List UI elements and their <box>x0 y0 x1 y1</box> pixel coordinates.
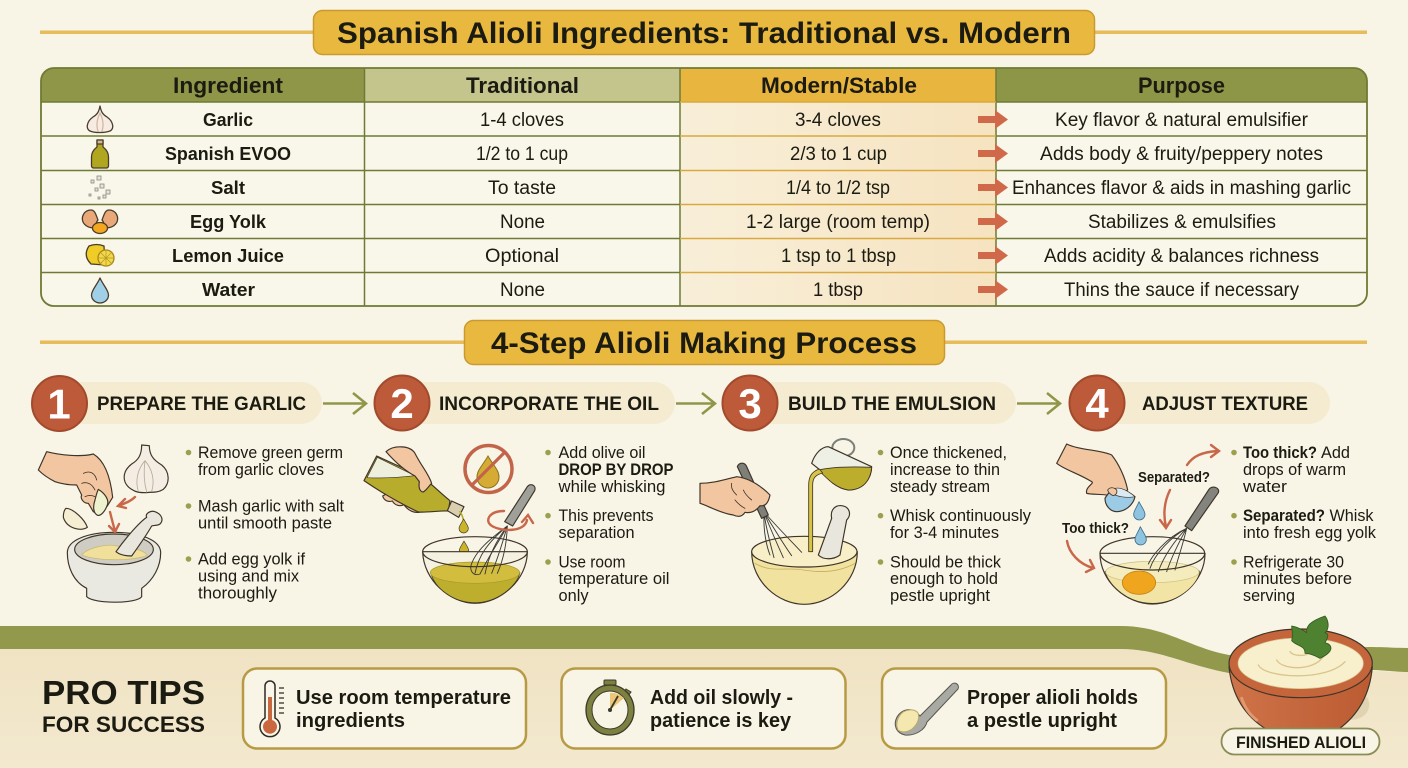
row: water: 1 tbsp <box>813 280 863 301</box>
step 1 <box>32 376 366 602</box>
step 3 instructions: Whisk continuously <box>890 506 1031 525</box>
row: Spanish EVOO: Spanish EVOO <box>165 144 291 164</box>
step 3 instructions: increase to thin <box>890 460 1000 479</box>
row: salt <box>89 176 1351 199</box>
row: salt: To taste <box>488 178 556 199</box>
bowl <box>1229 616 1372 729</box>
row: lemon juice: Optional <box>485 246 559 267</box>
step 1 instructions: using and mix <box>198 566 299 586</box>
row: water: Thins the sauce if necessary <box>1064 280 1299 301</box>
row: lemon juice: 1 tsp to 1 tbsp <box>781 246 896 267</box>
icon: stopwatch <box>586 680 634 735</box>
tip card: temperature: Use room temperature <box>296 687 511 709</box>
step 3 header <box>722 376 1016 430</box>
label: finished alioli: FINISHED ALIOLI <box>1236 733 1366 752</box>
step 2 instructions: DROP BY DROP <box>558 461 674 479</box>
row: Spanish EVOO: 2/3 to 1 cup <box>790 144 887 165</box>
table header row <box>173 73 1225 98</box>
icon: spoon <box>895 683 958 735</box>
row: garlic <box>87 106 1309 132</box>
tip card: slow oil: Add oil slowly - <box>650 687 793 709</box>
row: egg yolk: Stabilizes & emulsifies <box>1088 212 1276 233</box>
tip card: slow oil <box>562 668 846 748</box>
step 2 instructions: Add olive oil <box>558 443 646 462</box>
step 4 instructions: Whisk <box>1330 506 1374 525</box>
row: garlic: 3-4 cloves <box>795 110 881 131</box>
row: water <box>92 278 1299 303</box>
row: lemon juice: Adds acidity & balances richness <box>1044 246 1319 267</box>
row: egg yolk: 1-2 large (room temp) <box>746 212 930 233</box>
step 1 instructions: thoroughly <box>198 584 277 602</box>
tip card: pestle <box>882 668 1166 748</box>
step 4 instructions: Add <box>1321 443 1350 462</box>
step 3 header: 3 <box>738 380 762 427</box>
step 3 <box>700 376 1060 605</box>
title banner <box>40 10 1367 54</box>
step 4 instructions: Separated? <box>1243 507 1325 525</box>
table header row: Modern/Stable <box>761 73 917 98</box>
row: lemon juice: Lemon Juice <box>172 246 284 266</box>
arrows and labels: adjustments: Too thick? <box>1062 521 1129 537</box>
step 2 header <box>374 376 675 430</box>
illustration: garlic and mortar <box>38 445 168 602</box>
step 2 <box>364 376 715 605</box>
step 1 header: 1 <box>47 380 71 428</box>
pro tips heading <box>42 674 205 737</box>
step 1 instructions: Add egg yolk if <box>198 550 305 568</box>
row: Spanish EVOO <box>92 140 1323 168</box>
illustration: oil bottle <box>364 447 535 603</box>
step 4 instructions: minutes before <box>1243 569 1352 588</box>
title banner: Spanish Alioli Ingredients: Traditional vs. Modern <box>337 17 1071 50</box>
row: egg yolk <box>82 210 1276 234</box>
step 4 header: ADJUST TEXTURE <box>1142 394 1308 415</box>
illustration: emulsion bowl <box>700 439 872 604</box>
step 4 header <box>1070 376 1330 430</box>
arrow 2 to 3 <box>676 393 715 414</box>
arrows: into mortar <box>109 497 135 532</box>
step 1 header <box>32 376 322 431</box>
arrow 1 to 2 <box>323 393 366 414</box>
row: salt: 1/4 to 1/2 tsp <box>786 178 890 199</box>
footer band <box>0 626 1408 768</box>
step 1 instructions: Remove green germ <box>198 443 343 462</box>
step 1 instructions: from garlic cloves <box>198 460 324 479</box>
row: water: None <box>500 280 545 301</box>
icon: thermometer <box>260 681 284 737</box>
row: salt: Salt <box>211 178 245 198</box>
row: water: Water <box>202 280 255 300</box>
step 2 instructions: while whisking <box>558 477 666 496</box>
ingredients table <box>41 68 1367 306</box>
row: garlic: Key flavor & natural emulsifier <box>1055 110 1309 131</box>
tip card: slow oil: patience is key <box>650 710 792 732</box>
step 1 instructions: until smooth paste <box>198 514 332 532</box>
row: garlic: Garlic <box>203 110 253 130</box>
label: finished alioli <box>1222 728 1380 754</box>
finished alioli bowl <box>1222 616 1380 754</box>
row: salt: Enhances flavor & aids in mashing garlic <box>1012 178 1351 199</box>
row: Spanish EVOO: Adds body & fruity/peppery notes <box>1040 144 1323 165</box>
arrows and labels: adjustments: Separated? <box>1138 470 1210 486</box>
tip card: pestle: a pestle upright <box>967 710 1117 732</box>
step 3 instructions: enough to hold <box>890 569 998 588</box>
tip card: pestle: Proper alioli holds <box>967 687 1138 709</box>
table header row: Traditional <box>466 73 579 98</box>
step 4 instructions: Too thick? <box>1243 444 1317 462</box>
illustration: adjusting bowl <box>1057 444 1219 604</box>
table header row: Purpose <box>1138 73 1225 98</box>
arrow: whisk rotation <box>488 511 533 530</box>
arrows and labels: adjustments <box>1062 445 1219 572</box>
step 3 header: BUILD THE EMULSION <box>788 394 996 415</box>
row: garlic: 1-4 cloves <box>480 110 564 131</box>
step 4 instructions <box>1231 443 1376 605</box>
step 3 instructions: Should be thick <box>890 552 1001 572</box>
step 4 header: 4 <box>1085 380 1109 427</box>
step 3 instructions: steady stream <box>890 477 990 496</box>
step 4 instructions: into fresh egg yolk <box>1243 523 1376 542</box>
step 2 header: 2 <box>390 380 414 427</box>
row: lemon juice <box>86 244 1319 267</box>
step 4 instructions: Refrigerate 30 <box>1243 552 1344 572</box>
table header row: Ingredient <box>173 73 284 98</box>
arrow 3 to 4 <box>1017 393 1060 414</box>
step 2 instructions: separation <box>558 523 634 542</box>
step 4 instructions: water <box>1242 477 1287 496</box>
step 4 <box>1057 376 1376 605</box>
row: egg yolk: Egg Yolk <box>190 212 267 232</box>
pro tips heading: FOR SUCCESS <box>42 712 205 737</box>
step 3 instructions: Once thickened, <box>890 443 1007 462</box>
tip card: temperature <box>243 668 526 748</box>
step 2 instructions: This prevents <box>558 506 654 525</box>
step 1 instructions: Mash garlic with salt <box>198 496 344 516</box>
step 1 instructions <box>186 443 344 602</box>
process heading: 4-Step Alioli Making Process <box>491 327 917 360</box>
step 2 instructions: Use room <box>558 552 626 572</box>
step 3 instructions <box>878 443 1031 605</box>
step 3 instructions: for 3-4 minutes <box>890 523 999 542</box>
row: Spanish EVOO: 1/2 to 1 cup <box>476 144 568 165</box>
step 4 instructions: serving <box>1243 586 1295 605</box>
row: egg yolk: None <box>500 212 545 233</box>
step 4 instructions: drops of warm <box>1243 460 1346 479</box>
process heading <box>40 320 1367 364</box>
step 2 instructions: temperature oil <box>558 569 670 588</box>
icon: no oil sign <box>465 446 512 492</box>
step 2 instructions <box>545 443 674 605</box>
step 1 header: PREPARE THE GARLIC <box>97 394 306 415</box>
tip card: temperature: ingredients <box>296 710 405 732</box>
step 2 header: INCORPORATE THE OIL <box>439 394 659 415</box>
pro tips heading: PRO TIPS <box>42 674 205 711</box>
step 2 instructions: only <box>558 586 589 605</box>
step 3 instructions: pestle upright <box>890 586 990 605</box>
